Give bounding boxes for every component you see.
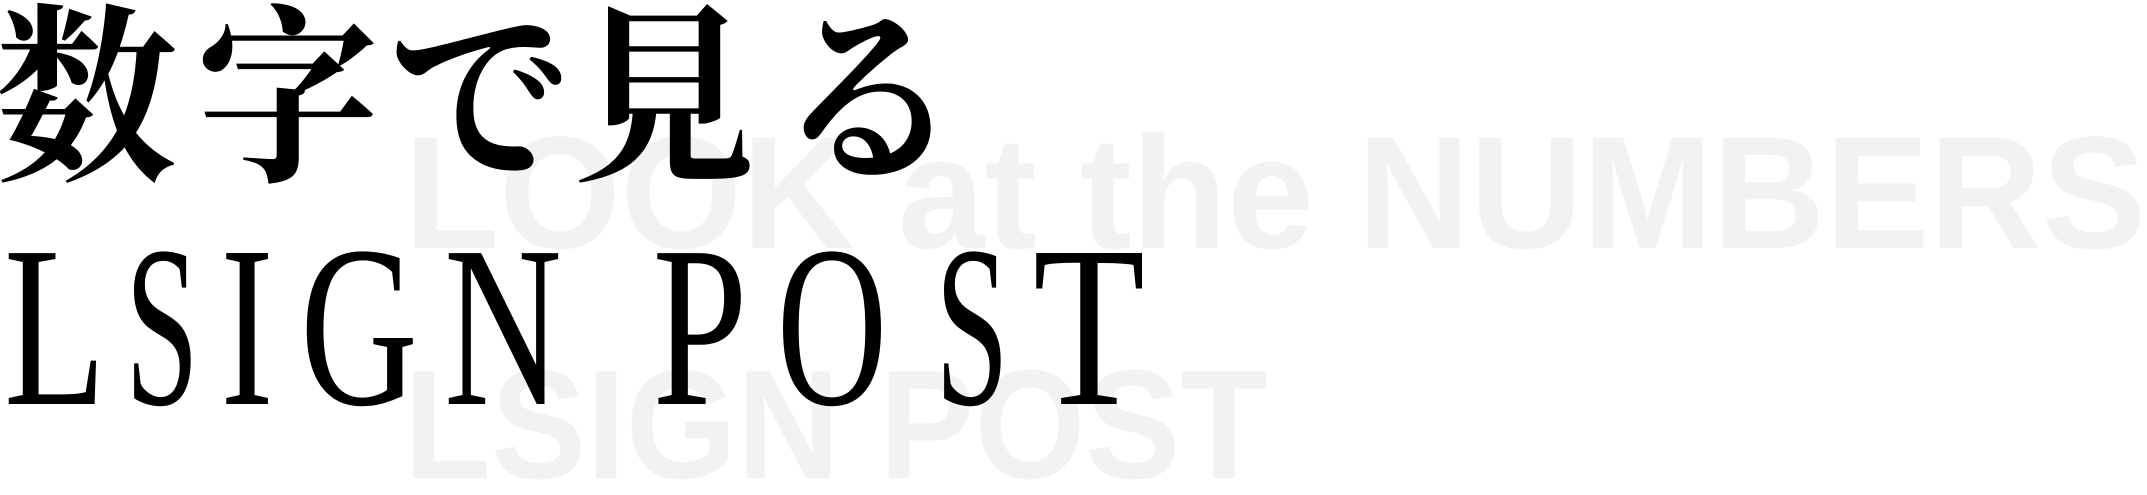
subtitle: LSIGN POST: S	[935, 198, 1009, 454]
background text: LOOK at the NUMBERS: LOOK at the NUMBERS	[404, 104, 2146, 282]
subtitle: LSIGN POST: N	[444, 200, 562, 455]
subtitle: LSIGN POST	[4, 198, 1145, 455]
subtitle: LSIGN POST: T	[1033, 199, 1145, 455]
subtitle: LSIGN POST: I	[221, 199, 273, 454]
subtitle: LSIGN POST: O	[777, 200, 887, 455]
subtitle: LSIGN POST: S	[125, 198, 199, 454]
title: 数字で見る	[0, 0, 960, 221]
subtitle: LSIGN POST: G	[300, 200, 418, 455]
subtitle: LSIGN POST: L	[4, 199, 106, 454]
subtitle: LSIGN POST: P	[652, 199, 748, 454]
